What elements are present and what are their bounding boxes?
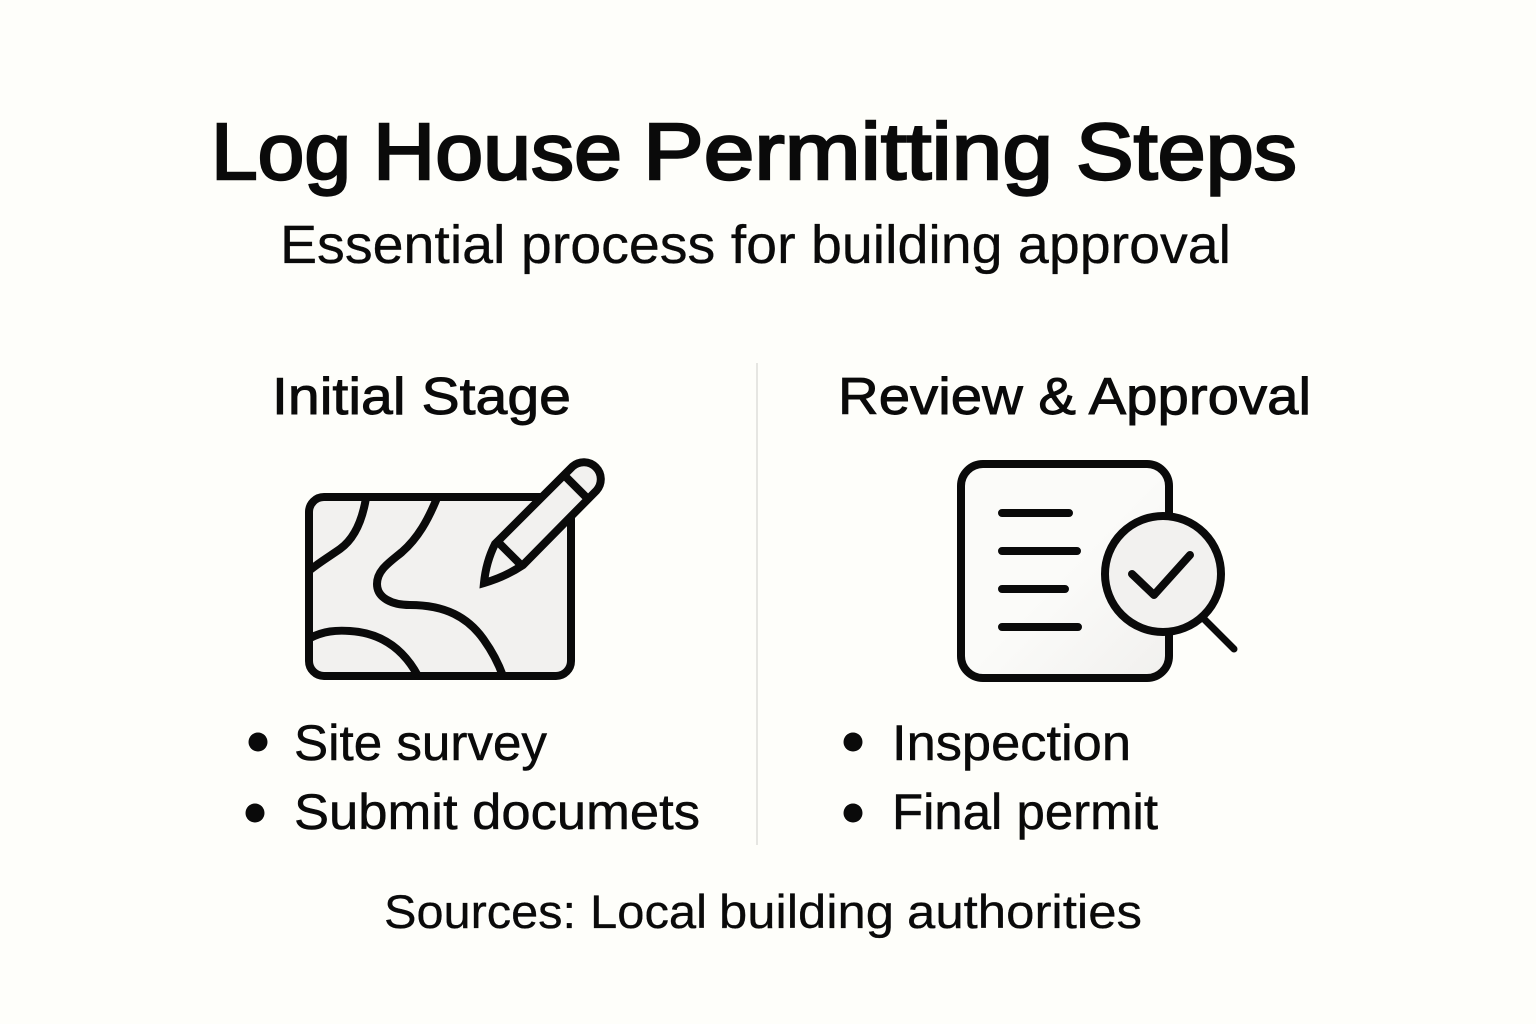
column divider xyxy=(756,363,758,845)
title: House xyxy=(373,107,622,196)
sources note: Sources: xyxy=(384,885,576,938)
title: Log xyxy=(211,107,351,196)
bullet list: review and approval: Final permit xyxy=(892,784,1158,840)
title: Permitting xyxy=(643,107,1053,196)
bullet list: initial stage: Site survey xyxy=(294,715,547,771)
bullet list: review and approval xyxy=(844,715,1158,840)
title xyxy=(211,107,1297,196)
title: Steps xyxy=(1076,107,1297,196)
subtitle: Essential process for building approval xyxy=(280,215,1231,275)
bullet list: review and approval: Inspection xyxy=(892,715,1131,771)
sources note xyxy=(384,885,1142,938)
panel: initial stage xyxy=(246,368,700,840)
bullet list: initial stage: Submit documets xyxy=(294,784,700,840)
sources note: building xyxy=(719,885,894,938)
heading: review and approval: Review & Approval xyxy=(838,368,1311,426)
bullet list: initial stage xyxy=(246,715,700,840)
sources note: Local xyxy=(590,885,707,938)
sources note: authorities xyxy=(907,885,1142,938)
icon: document with magnifier check xyxy=(961,464,1234,678)
heading: initial stage: Initial Stage xyxy=(272,368,571,426)
panel: review and approval xyxy=(838,368,1311,840)
icon: site map with pencil xyxy=(309,462,601,676)
